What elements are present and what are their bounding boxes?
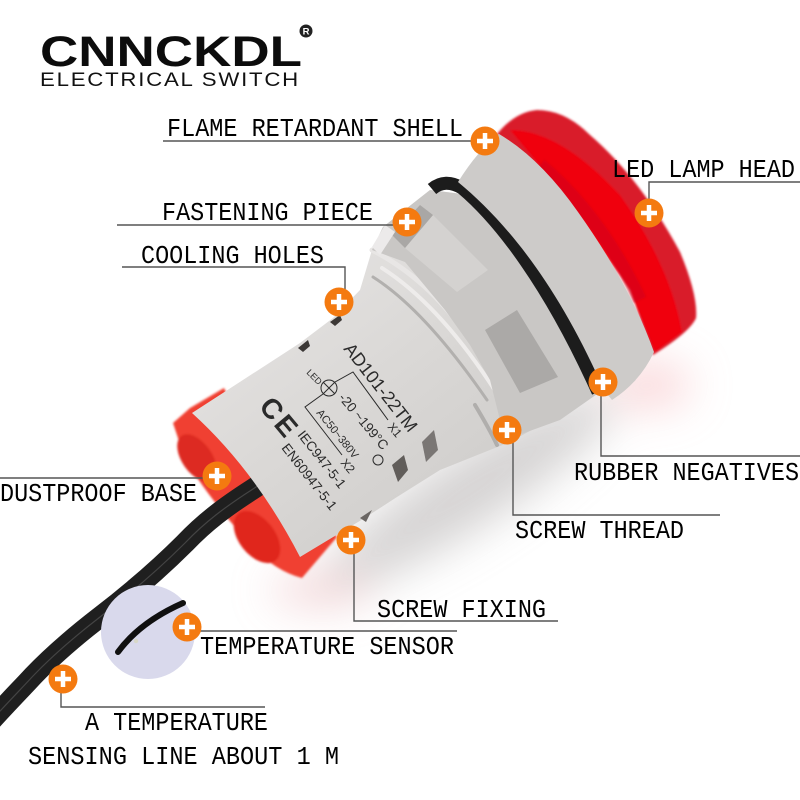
marker: LED head (634, 198, 664, 228)
temperature range: -20 ~199°C (336, 390, 392, 453)
registered mark: R (303, 26, 310, 38)
CE mark: CE (253, 391, 306, 445)
vents (298, 315, 438, 522)
marker: rubber (588, 368, 618, 396)
callout: rubber negatives (574, 382, 800, 488)
callout: screw thread: SCREW THREAD (515, 516, 684, 546)
callout: screw fixing: SCREW FIXING (377, 595, 546, 625)
wiring diagram (305, 372, 388, 465)
callout: LED lamp head (612, 155, 800, 213)
printed markings: X2 (338, 456, 358, 476)
collar and fastening piece (372, 190, 600, 440)
callout: screw thread (513, 430, 720, 546)
product photo: temperature indicator lamp (0, 110, 696, 722)
callout: dustproof base: DUSTPROOF BASE (0, 479, 197, 509)
voltage: AC50~380V (314, 407, 361, 462)
red LED lamp head (497, 110, 696, 355)
callout: fastening piece: FASTENING PIECE (162, 198, 373, 228)
marker: base (202, 462, 232, 490)
device shadow (270, 363, 690, 613)
marker: thread (492, 416, 522, 444)
callout: flame retardant shell: FLAME RETARDANT SHELL (167, 114, 463, 144)
black sensor cable (0, 481, 265, 722)
callout: screw fixing (354, 540, 558, 625)
brand name: CNNCKDL (40, 28, 302, 76)
callout: temperature sensing line: A TEMPERATURE (85, 708, 268, 738)
callout: cooling holes (122, 241, 345, 300)
marker: screw fixing (336, 526, 366, 554)
marker: sensor (172, 612, 202, 642)
callout: temperature sensing line (28, 679, 339, 772)
sensor inset circle (101, 585, 195, 679)
rubber gasket (432, 183, 598, 392)
registered mark (300, 24, 312, 38)
standards: IEC947-5-1 (295, 428, 349, 491)
tagline: ELECTRICAL SWITCH (40, 70, 300, 91)
printed markings: EN60947-5-1 (279, 441, 340, 513)
marker: cooling holes (324, 288, 354, 316)
grey body and thread silhouette (192, 190, 600, 557)
marker: fastening piece (392, 208, 422, 236)
callout: cooling holes: COOLING HOLES (141, 241, 324, 271)
callout: temperature sensor: TEMPERATURE SENSOR (200, 632, 454, 662)
marker: shell (470, 126, 500, 156)
model number: AD101-22TM (340, 339, 422, 436)
red rear base (169, 388, 337, 578)
grey flame retardant flange (458, 134, 654, 400)
printed markings (253, 339, 422, 513)
callout: temperature sensing line: SENSING LINE ABOUT 1 M (28, 742, 339, 772)
marker: sensing line (48, 664, 78, 694)
logo (40, 24, 312, 91)
threaded section ribs (372, 250, 500, 445)
LED label: LED (305, 367, 324, 387)
terminals: X1 (385, 420, 405, 440)
orange plus markers (48, 126, 664, 694)
